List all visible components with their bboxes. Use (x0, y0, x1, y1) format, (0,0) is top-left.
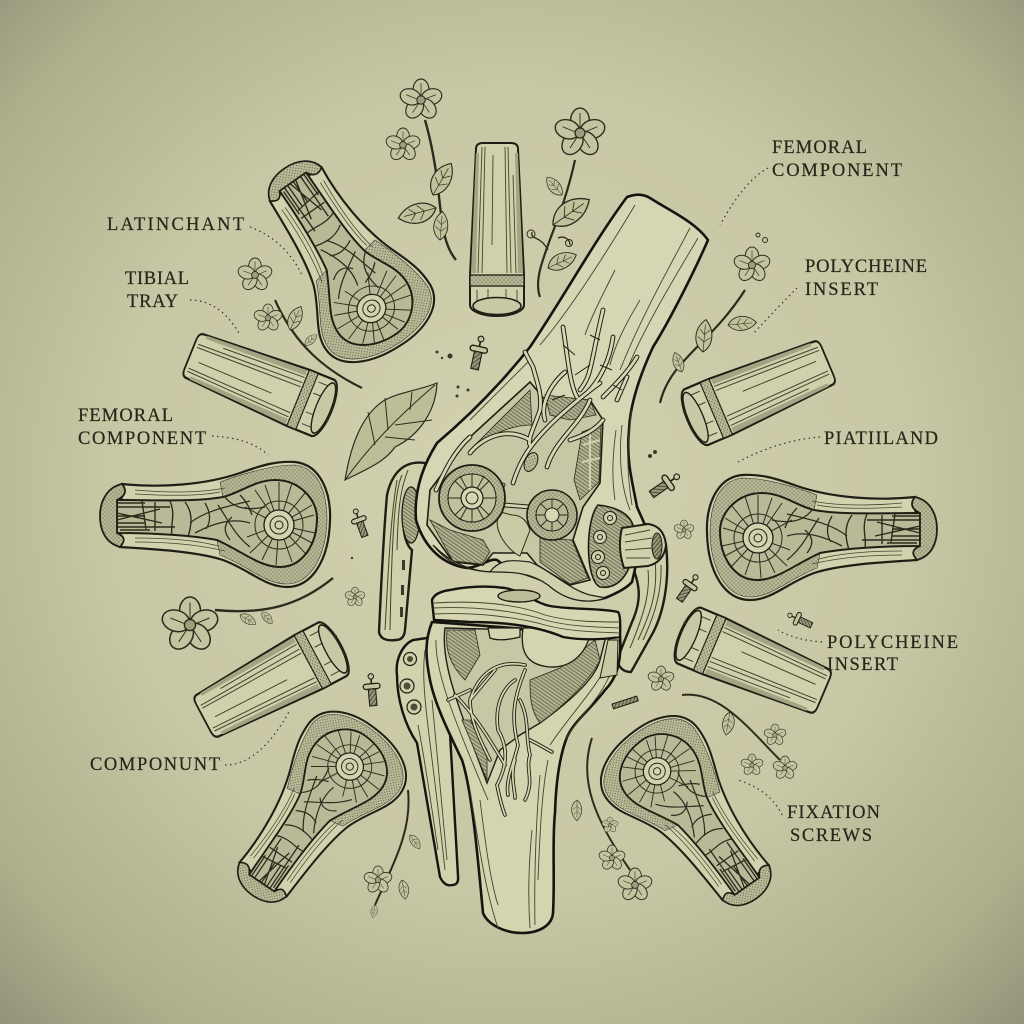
panel: paddle components (100, 138, 937, 936)
screw: right lower (673, 571, 704, 605)
gear: large hub (439, 465, 505, 531)
screw: right upper (646, 468, 684, 502)
branching veins (436, 310, 637, 507)
label: latinchant: LATINCHANT (107, 215, 244, 235)
label: piatiiland: PIATIILAND (824, 429, 938, 449)
label: femoral component right: COMPONENT (772, 161, 902, 181)
screw: lower left (362, 673, 382, 706)
label: tibial tray: TRAY (127, 292, 178, 312)
paddle: left (100, 462, 330, 587)
label: polycheine insert lower: POLYCHEINE (827, 633, 958, 653)
label: fixation screws: SCREWS (790, 826, 872, 846)
panel: botanical sprigs (159, 79, 798, 918)
panel: cylinder sleeves (179, 143, 839, 745)
label: femoral component right: FEMORAL (772, 138, 867, 158)
right bracket (617, 524, 667, 672)
label: polycheine insert lower (827, 633, 958, 675)
panel: screws (348, 334, 814, 709)
cylinder: upper left (179, 326, 344, 440)
tibial veins (448, 664, 552, 815)
label: femoral component left (78, 406, 206, 449)
lower femoral condyle ledge (433, 545, 606, 601)
gear: horizontal pin (620, 524, 666, 568)
label: polycheine insert upper: POLYCHEINE (805, 257, 927, 277)
screw: left (348, 506, 372, 539)
gear: oval bearing with holes (588, 505, 634, 587)
label: femoral component left: FEMORAL (78, 406, 173, 426)
cylinder: upper right (675, 333, 839, 449)
label: componunt: COMPONUNT (90, 755, 220, 775)
cylinder: lower left (189, 618, 356, 745)
paddle: bottom left (211, 696, 423, 932)
sprig: right upper (660, 233, 772, 403)
label: fixation screws: FIXATION (787, 803, 880, 823)
mesh patches (430, 390, 601, 584)
label: tibial tray: TIBIAL (125, 269, 189, 289)
label leaders (190, 168, 822, 815)
tibial mesh window (444, 628, 607, 783)
screw: upper centre (466, 334, 490, 371)
sprig: bottom right (572, 738, 654, 902)
sprig: bottom left (363, 790, 423, 918)
tibial post with screw holes (397, 638, 458, 885)
label: polycheine insert upper: INSERT (805, 280, 878, 300)
label: femoral component left: COMPONENT (78, 429, 206, 449)
polyethylene tibial plate (432, 587, 620, 639)
small flower ornaments (344, 520, 695, 692)
femoral component (416, 195, 708, 601)
left bracket (379, 463, 426, 640)
sprig: top centre right (527, 108, 607, 297)
screw: thread stub (612, 696, 638, 709)
specks (351, 350, 657, 559)
sprig: feather leaf (345, 383, 437, 480)
paddle: right (707, 475, 937, 600)
paddle: bottom right (584, 700, 797, 936)
sprig: upper left (236, 258, 362, 388)
gear: small hub (527, 490, 577, 540)
screw: far right (785, 608, 814, 632)
tibial mesh patches (447, 630, 600, 780)
sprig: right lower (682, 695, 798, 780)
paddle: top left (227, 138, 449, 382)
label: femoral component right (772, 138, 902, 181)
cylinder: top (470, 143, 524, 317)
label: polycheine insert lower: INSERT (827, 655, 898, 675)
tibial component (426, 622, 620, 933)
mesh window (427, 382, 603, 585)
label: fixation screws (787, 803, 880, 846)
label: tibial tray (125, 269, 189, 312)
sprig: top centre left (384, 79, 458, 260)
cylinder: lower right (668, 604, 835, 721)
sprig: left lower (159, 578, 333, 654)
label: polycheine insert upper (805, 257, 927, 300)
